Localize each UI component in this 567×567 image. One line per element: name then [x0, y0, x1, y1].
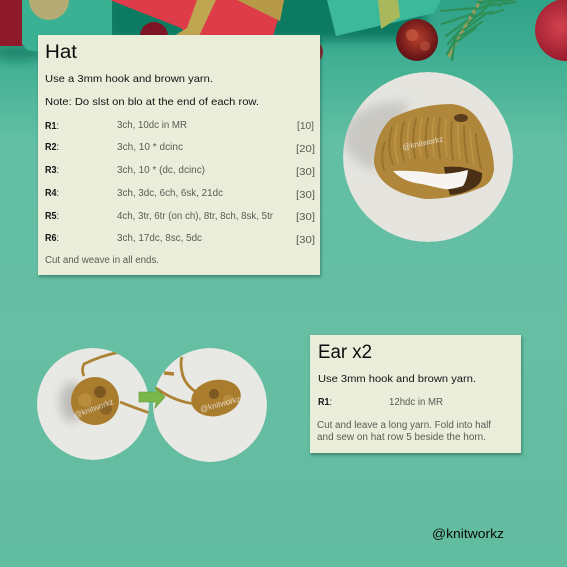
icon: green arrow — [139, 387, 165, 408]
row R1 — [45, 120, 314, 132]
row R5: R5: — [45, 210, 59, 222]
row R1: R1: — [318, 396, 332, 408]
text: finishing — [317, 420, 491, 443]
row R4: [30] — [296, 190, 315, 201]
panel: ear pattern — [310, 335, 521, 453]
row R3 — [45, 164, 315, 178]
text: hook and yarn: Use 3mm hook and brown yarn. — [318, 373, 476, 385]
row R2: 3ch, 10 * dcinc — [117, 142, 183, 153]
text: note: Note: Do slst on blo at the end of each row. — [45, 96, 259, 108]
row R6: R6: — [45, 232, 59, 244]
credit: handle: @knitworkz — [432, 526, 504, 541]
row R4: R4: — [45, 187, 59, 199]
heading: Hat: Hat — [45, 42, 78, 63]
row R3: R3: — [45, 164, 59, 176]
row R2: R2: — [45, 141, 59, 153]
photo: ear step one — [37, 348, 150, 460]
row R4: 3ch, 3dc, 6ch, 6sk, 21dc — [117, 188, 223, 199]
photo: crocheted hat — [343, 72, 513, 242]
heading: Ear x2: Ear x2 — [318, 342, 372, 363]
row R4 — [45, 187, 315, 201]
photo: ear step one: @knitworkz — [73, 397, 115, 420]
text: finishing: Cut and weave in all ends. — [45, 255, 159, 266]
row R5: 4ch, 3tr, 6tr (on ch), 8tr, 8ch, 8sk, 5tr — [117, 211, 274, 222]
row R3: [30] — [296, 167, 315, 178]
row R1: 3ch, 10dc in MR — [117, 120, 187, 131]
row R1: R1: — [45, 120, 59, 132]
photo: crocheted hat: @knitworkz — [402, 135, 444, 152]
row R1 — [318, 396, 443, 408]
row R6 — [45, 232, 315, 246]
row R6: 3ch, 17dc, 8sc, 5dc — [117, 233, 202, 244]
row R2 — [45, 141, 315, 155]
row R6: [30] — [296, 235, 315, 246]
text: finishing: and sew on hat row 5 beside the horn. — [317, 432, 486, 443]
row R2: [20] — [296, 144, 315, 155]
decoration: christmas gifts and ornaments — [0, 0, 567, 64]
row R5: [30] — [296, 212, 315, 223]
photo: ear step two — [153, 348, 267, 462]
panel: hat pattern — [38, 35, 320, 275]
photo: ear step two: @knitworkz — [199, 395, 242, 414]
text: finishing: Cut and leave a long yarn. Fold into half — [317, 420, 491, 431]
row R1: [10] — [297, 121, 314, 132]
text: hook and yarn: Use a 3mm hook and brown yarn. — [45, 73, 213, 85]
row R3: 3ch, 10 * (dc, dcinc) — [117, 165, 205, 176]
row R5 — [45, 210, 315, 223]
row R1: 12hdc in MR — [389, 397, 443, 408]
